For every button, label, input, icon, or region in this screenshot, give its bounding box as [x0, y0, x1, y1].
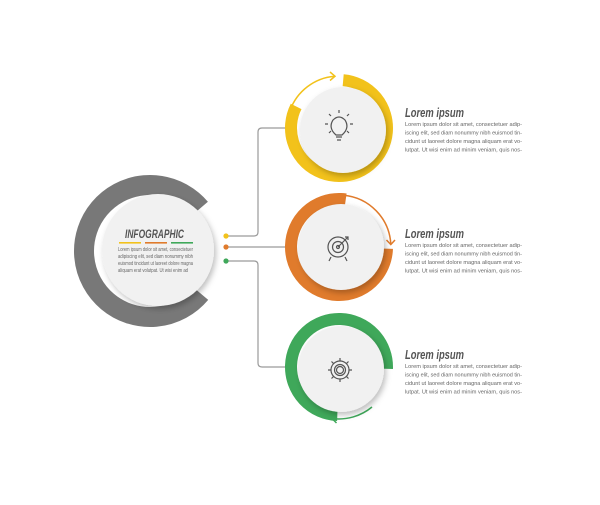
text block 2 [405, 226, 522, 274]
text block 2: lutpat. Ut wisi enim ad minim veniam, quis nos- [405, 268, 522, 274]
text block 1: Lorem ipsum [405, 105, 464, 120]
text block 3 [405, 347, 522, 396]
text block: intro: aliquam erat volutpat. Ut wisi enim ad [118, 268, 188, 274]
icon: light bulb [325, 110, 353, 140]
dots [223, 233, 229, 264]
text block 1: Lorem ipsum dolor sit amet, consectetuer adip- [405, 122, 522, 128]
text block 2: Lorem ipsum dolor sit amet, consectetuer adip- [405, 243, 522, 249]
text block 1: lutpat. Ut wisi enim ad minim veniam, quis nos- [405, 148, 522, 154]
icon: target [328, 237, 348, 261]
text block 2: Lorem ipsum [405, 226, 464, 241]
heading: infographic: INFOGRAPHIC [125, 227, 184, 241]
text block 1 [405, 105, 522, 154]
text block 1: iscing elit, sed diam nonummy nibh euismod tin- [405, 130, 522, 136]
text block 3: iscing elit, sed diam nonummy nibh euismod tin- [405, 372, 522, 378]
step 3: green [289, 317, 389, 423]
icon: gear [328, 358, 352, 382]
text block 3: Lorem ipsum [405, 347, 464, 362]
text block: intro: Lorem ipsum dolor sit amet, consectetuer [118, 247, 193, 253]
text block: intro [118, 247, 193, 274]
text block 2: iscing elit, sed diam nonummy nibh euismod tin- [405, 252, 522, 258]
text block 1: cidunt ut laoreet dolore magna aliquam erat vo- [405, 139, 522, 145]
connector lines [226, 128, 288, 367]
text block 3: cidunt ut laoreet dolore magna aliquam erat vo- [405, 381, 522, 387]
step 1: yellow [287, 72, 391, 180]
text block 3: lutpat. Ut wisi enim ad minim veniam, quis nos- [405, 390, 522, 396]
text block: intro: euismod tincidunt ut laoreet dolore magna [118, 261, 193, 267]
step 2: orange [289, 195, 395, 297]
text block: intro: adipiscing elit, sed diam nonummy nibh [118, 254, 193, 260]
text block 3: Lorem ipsum dolor sit amet, consectetuer adip- [405, 364, 522, 370]
text block 2: cidunt ut laoreet dolore magna aliquam erat vo- [405, 260, 522, 266]
main circle: infographic [57, 158, 243, 344]
